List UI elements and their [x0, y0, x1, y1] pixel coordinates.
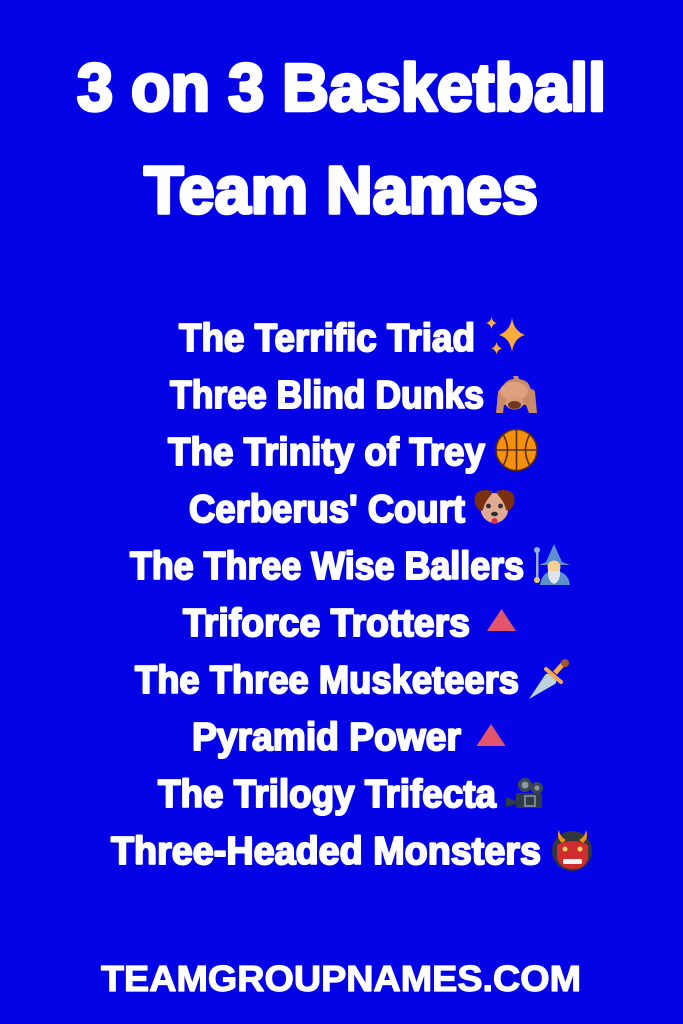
team name: Three Blind Dunks: Three Blind Dunks [170, 374, 484, 417]
icon: movie camera [506, 778, 543, 808]
icon: ogre [552, 830, 592, 871]
icon: see-no-evil monkey [496, 376, 537, 413]
team name: Cerberus' Court: Cerberus' Court [189, 488, 465, 531]
title: 3 on 3 Basketball [77, 50, 606, 126]
team name: The Trinity of Trey: The Trinity of Trey [168, 431, 485, 474]
team name: Pyramid Power: Pyramid Power [192, 716, 461, 759]
title: Team Names [144, 153, 538, 228]
icon: sparkles [486, 317, 525, 354]
icon: basketball [496, 430, 537, 470]
team name: Triforce Trotters: Triforce Trotters [183, 602, 470, 645]
team name: The Three Musketeers: The Three Musketeers [135, 659, 519, 702]
icon: dog [474, 490, 515, 524]
team name: Three-Headed Monsters: Three-Headed Monsters [111, 830, 541, 873]
icon: triangle [487, 609, 516, 631]
icon: triangle [476, 724, 506, 746]
team name: The Three Wise Ballers: The Three Wise Ballers [130, 545, 524, 588]
title [77, 50, 606, 228]
icon: dagger [529, 659, 569, 699]
team name list [111, 317, 592, 873]
footer website: TEAMGROUPNAMES.COM [101, 958, 581, 999]
team name: The Terrific Triad: The Terrific Triad [179, 317, 475, 360]
icon: wizard [534, 544, 570, 585]
team name: The Trilogy Trifecta: The Trilogy Trifecta [158, 773, 496, 816]
